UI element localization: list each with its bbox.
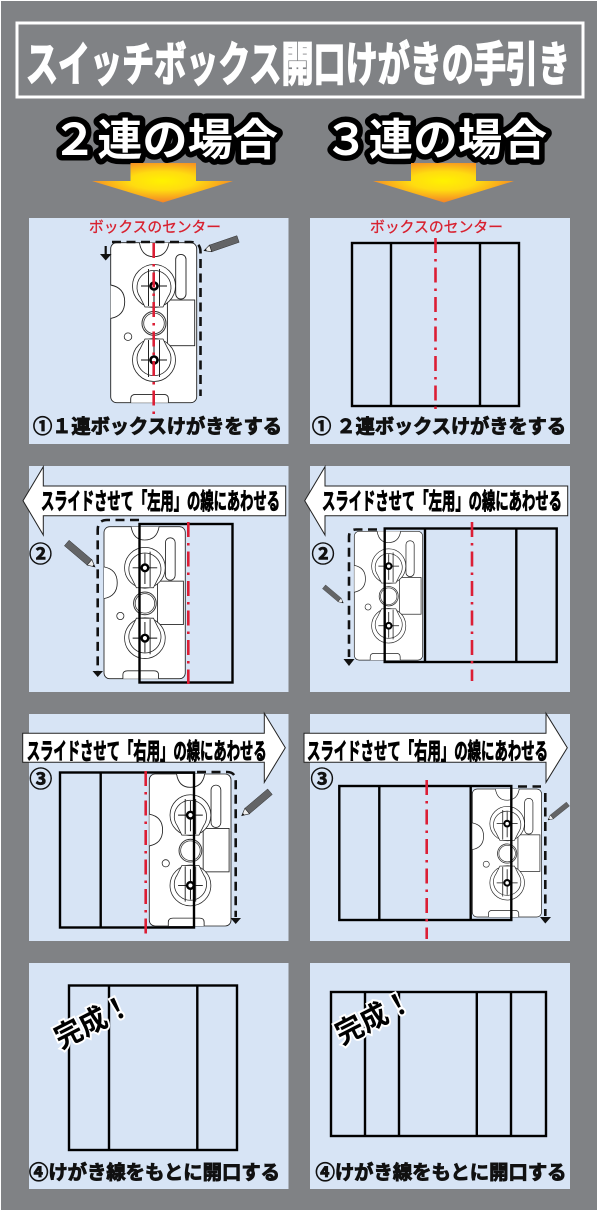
heading: 2連の場合: ２連の場合 (52, 116, 278, 165)
box outline (385, 528, 557, 662)
arrow head (100, 254, 112, 260)
red line (187, 522, 190, 684)
divider (364, 992, 366, 1136)
slide text: スライドさせて「右用」の線にあわせる (27, 738, 267, 764)
arrow: down left (92, 163, 233, 202)
slide arrow (23, 713, 285, 782)
divider (398, 992, 400, 1136)
slide text: スライドさせて「左用」の線にあわせる (41, 488, 280, 514)
red center line (152, 243, 155, 415)
arrow head (344, 659, 354, 666)
panel: 2-gang step 2 (23, 466, 288, 692)
divider (479, 243, 481, 406)
title (17, 23, 583, 97)
switch box (354, 531, 423, 660)
pencil (546, 802, 570, 822)
pencil (322, 585, 345, 605)
box outline (140, 524, 232, 682)
outline (352, 243, 519, 406)
panel: 3-gang step 1 (310, 218, 570, 444)
divider (378, 786, 380, 920)
dashed scribe line (112, 242, 200, 396)
panel: 3-gang step 3 (304, 713, 570, 941)
divider (470, 786, 472, 920)
divider (196, 986, 199, 1150)
step number: ③ (29, 766, 52, 792)
center label: ボックスのセンター (89, 219, 221, 236)
divider (515, 528, 517, 662)
divider (424, 528, 426, 662)
slide arrow (305, 467, 568, 535)
panel: 2-gang step 3 (23, 713, 288, 941)
arrow head (230, 918, 241, 924)
box outline (339, 786, 511, 920)
step number: ② (29, 541, 52, 567)
divider (476, 992, 478, 1136)
down arrow (105, 246, 107, 255)
switch box (111, 243, 197, 403)
box outline (60, 772, 194, 928)
caption: ④けがき線をもとに開口する (316, 1161, 566, 1184)
arrow head (92, 671, 103, 677)
pencil (203, 236, 239, 254)
switch box (104, 527, 185, 679)
outline (331, 992, 546, 1136)
divider (99, 772, 102, 928)
arrow head (540, 917, 551, 924)
outline (69, 986, 237, 1150)
switch box (472, 789, 542, 917)
center label: ボックスのセンター (370, 219, 503, 236)
panel: 3-gang step 4 (310, 963, 570, 1189)
divider (510, 992, 512, 1136)
done label: 完成！ (49, 989, 137, 1055)
dashed scribe line (98, 520, 139, 672)
dashed scribe line (197, 772, 236, 917)
red line (425, 780, 428, 939)
caption: ④けがき線をもとに開口する (29, 1161, 280, 1184)
pencil (239, 789, 272, 818)
red line (471, 522, 473, 681)
arrow: down right (373, 163, 514, 202)
panel: 2-gang step 4 (29, 963, 288, 1189)
panel: 2-gang step 1 (29, 218, 288, 444)
caption: ① ２連ボックスけがきをする (312, 415, 566, 438)
caption: ①１連ボックスけがきをする (33, 415, 282, 438)
panel: 3-gang step 2 (305, 466, 570, 692)
dashed scribe line (349, 530, 377, 657)
red center line (434, 238, 437, 415)
dashed scribe line right (544, 793, 547, 916)
slide arrow (304, 713, 567, 782)
switch box (149, 774, 231, 926)
step number: ② (312, 541, 334, 567)
divider (108, 986, 110, 1150)
divider (390, 243, 392, 406)
step number: ③ (310, 766, 334, 792)
pencil (64, 540, 97, 570)
dashed scribe line (518, 785, 541, 788)
done label: 完成！ (330, 985, 418, 1051)
slide arrow (23, 467, 286, 535)
heading: 3連の場合: ３連の場合 (324, 116, 547, 165)
red line (144, 771, 147, 934)
